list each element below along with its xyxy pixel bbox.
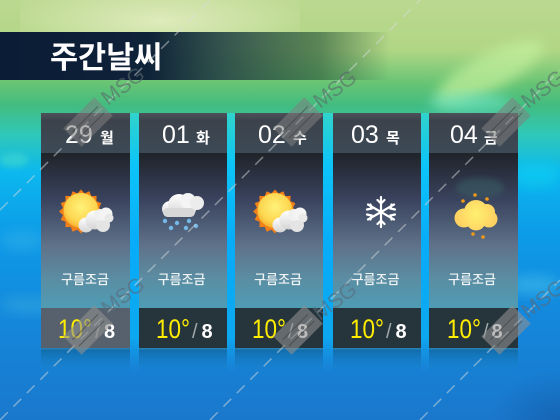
panel: day 04: 10° xyxy=(447,314,481,344)
panel: day 03: 10° xyxy=(350,314,384,344)
panel: day 03: / xyxy=(386,321,392,343)
panel: day 29: / xyxy=(95,321,101,343)
panel: day 01: 구름조금 xyxy=(158,272,205,287)
panel: day 02: 10° xyxy=(252,314,286,344)
panel: day 01: 8 xyxy=(202,321,213,343)
panel: day 01: / xyxy=(192,321,198,343)
watermark: MSG logos: MSG xyxy=(309,66,361,113)
panel: day 29 xyxy=(41,113,130,377)
panel: day 04: 금 xyxy=(484,130,498,147)
icon: sun with cloud xyxy=(59,190,114,234)
panel: day 02: 02 xyxy=(258,121,286,149)
panel: day 03: 목 xyxy=(386,130,400,147)
panel: day 01: 화 xyxy=(196,130,210,147)
icon: yellow cloud xyxy=(454,193,498,239)
watermark: MSG logos: MSG xyxy=(97,273,149,320)
panel: day 02: 8 xyxy=(297,321,308,343)
icon: snowflake xyxy=(367,197,395,227)
panel: day 02: 수 xyxy=(293,130,307,147)
panel: day 02 xyxy=(235,113,323,377)
watermark: MSG logos: MSG xyxy=(309,278,361,325)
panel: day 04: / xyxy=(483,321,489,343)
panel: day 29: 구름조금 xyxy=(61,272,109,287)
panel: day 02: 구름조금 xyxy=(254,272,302,287)
panel: day 03: 8 xyxy=(396,321,407,343)
panel: day 04: 8 xyxy=(492,321,503,343)
panel: day 01: 10° xyxy=(156,314,190,344)
panel: day 04 xyxy=(429,113,518,377)
panel: day 04: 구름조금 xyxy=(448,272,496,287)
panel: day 03: 구름조금 xyxy=(352,272,399,287)
panel: day 29: 29 xyxy=(65,121,93,149)
panel: day 01: 01 xyxy=(162,121,190,149)
panel: day 04: 04 xyxy=(450,121,478,149)
title bar xyxy=(0,32,390,80)
watermark: MSG logos xyxy=(63,63,560,355)
watermark: MSG logos: MSG xyxy=(97,63,149,110)
icon: sun with cloud xyxy=(253,190,308,234)
panel: day 03 xyxy=(333,113,421,377)
panel: day 29: 10° xyxy=(58,314,92,344)
panel: day 02: / xyxy=(288,321,294,343)
panel: day 01 xyxy=(139,113,227,377)
panel: day 03: 03 xyxy=(351,121,379,149)
icon: rain cloud xyxy=(162,193,204,230)
panel: day 29: 8 xyxy=(104,321,115,343)
panel: day 29: 월 xyxy=(100,130,114,147)
title: 주간날씨 xyxy=(50,41,162,75)
